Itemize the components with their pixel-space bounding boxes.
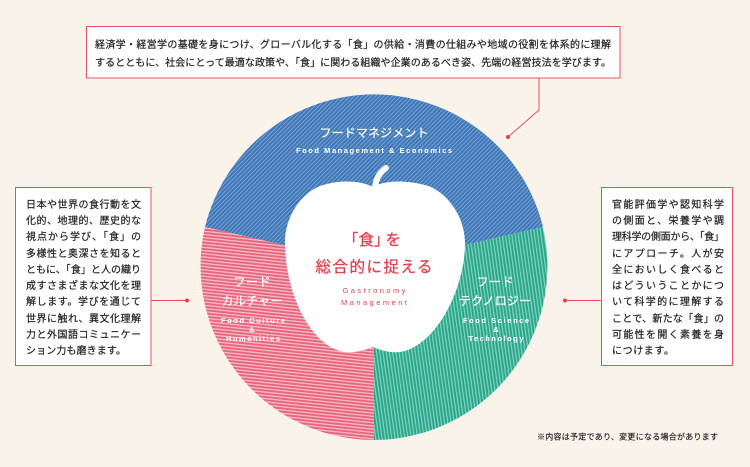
callout: right text box: 全においしく食べると <box>612 263 724 276</box>
heading: gastronomy management: Management <box>341 298 408 307</box>
heading: food culture <box>221 275 285 343</box>
callout: left text box: 視点から学び、「食」の <box>26 230 141 243</box>
callout: top text box: 経済学・経営学の基礎を身につけ、グローバル化する「食」の供給・消費の仕組みや地域の役割を体系的に理解 <box>95 38 611 51</box>
callout: right text box: ことで、新たな「食」の <box>612 313 724 325</box>
heading: food culture: Humanities <box>226 334 280 343</box>
footnote: ※内容は予定であり、変更になる場合があります <box>537 432 718 442</box>
heading: food culture: カルチャー <box>222 294 282 308</box>
connector: right box to circle <box>563 298 601 302</box>
circular diagram <box>201 94 547 440</box>
callout: right text box: の側面と、栄養学や調 <box>612 214 724 227</box>
heading: gastronomy management: Gastronomy <box>342 286 406 295</box>
heading: food technology: & <box>493 325 499 334</box>
callout: right text box: 理科学の側面から、「食」 <box>612 230 724 243</box>
callout: left text box: 成すさまざまな文化を理 <box>26 279 141 292</box>
callout: left text box: 日本や世界の食行動を文 <box>26 198 141 211</box>
apple centre <box>285 168 465 352</box>
connector: left box to circle <box>151 298 189 302</box>
heading: food management: フードマネジメント <box>320 126 428 140</box>
callout: top text box <box>86 26 620 78</box>
heading: food technology: Technology <box>468 334 524 343</box>
callout: left text box: 解します。学びを通じて <box>26 295 141 308</box>
callout: right text box: にアプローチ。人が安 <box>612 247 724 260</box>
segment: food technology <box>374 227 547 440</box>
callout: left text box: ともに、「食」と人の織り <box>26 263 141 276</box>
callout: left text box: 力と外国語コミュニケー <box>26 328 141 341</box>
callout: right text box: はどういうことかにつ <box>612 280 724 292</box>
callout: left text box: 化的、地理的、歴史的な <box>26 214 141 227</box>
callout: left text box <box>16 188 151 366</box>
heading: food technology: フード <box>476 275 514 289</box>
heading: food technology <box>459 275 531 343</box>
segment: food management <box>205 94 543 266</box>
segment: food culture <box>201 227 374 440</box>
heading: food technology: Food Science <box>463 316 529 325</box>
heading: gastronomy management: 「食」を <box>343 231 401 249</box>
callout: left text box: 世界に触れ、異文化理解 <box>26 312 141 325</box>
heading: food management: Food Management & Economics <box>296 146 452 155</box>
callout: right text box: 可能性を開く素養を身 <box>612 328 724 341</box>
callout: left text box: ション力も磨きます。 <box>26 344 126 357</box>
heading: food culture: フード <box>234 275 270 289</box>
heading: food culture: & <box>249 325 255 334</box>
heading: food culture: Food Culture <box>221 316 285 325</box>
heading: food management <box>296 126 452 155</box>
callout: right text box: につけます。 <box>612 345 674 357</box>
callout: right text box <box>602 188 732 366</box>
heading: gastronomy management <box>316 231 432 307</box>
callout: right text box: いて科学的に理解する <box>612 295 724 308</box>
heading: gastronomy management: 総合的に捉える <box>316 258 432 276</box>
heading: food technology: テクノロジー <box>459 294 531 308</box>
callout: top text box: するとともに、社会にとって最適な政策や、「食」に関わる組織や企業のあるべき姿、先端の経営技法を学びます。 <box>95 56 611 69</box>
connector: top box to circle <box>506 78 539 139</box>
callout: left text box: 多様性と奥深さを知ると <box>26 247 141 260</box>
callout: right text box: 官能評価学や認知科学 <box>612 198 724 211</box>
